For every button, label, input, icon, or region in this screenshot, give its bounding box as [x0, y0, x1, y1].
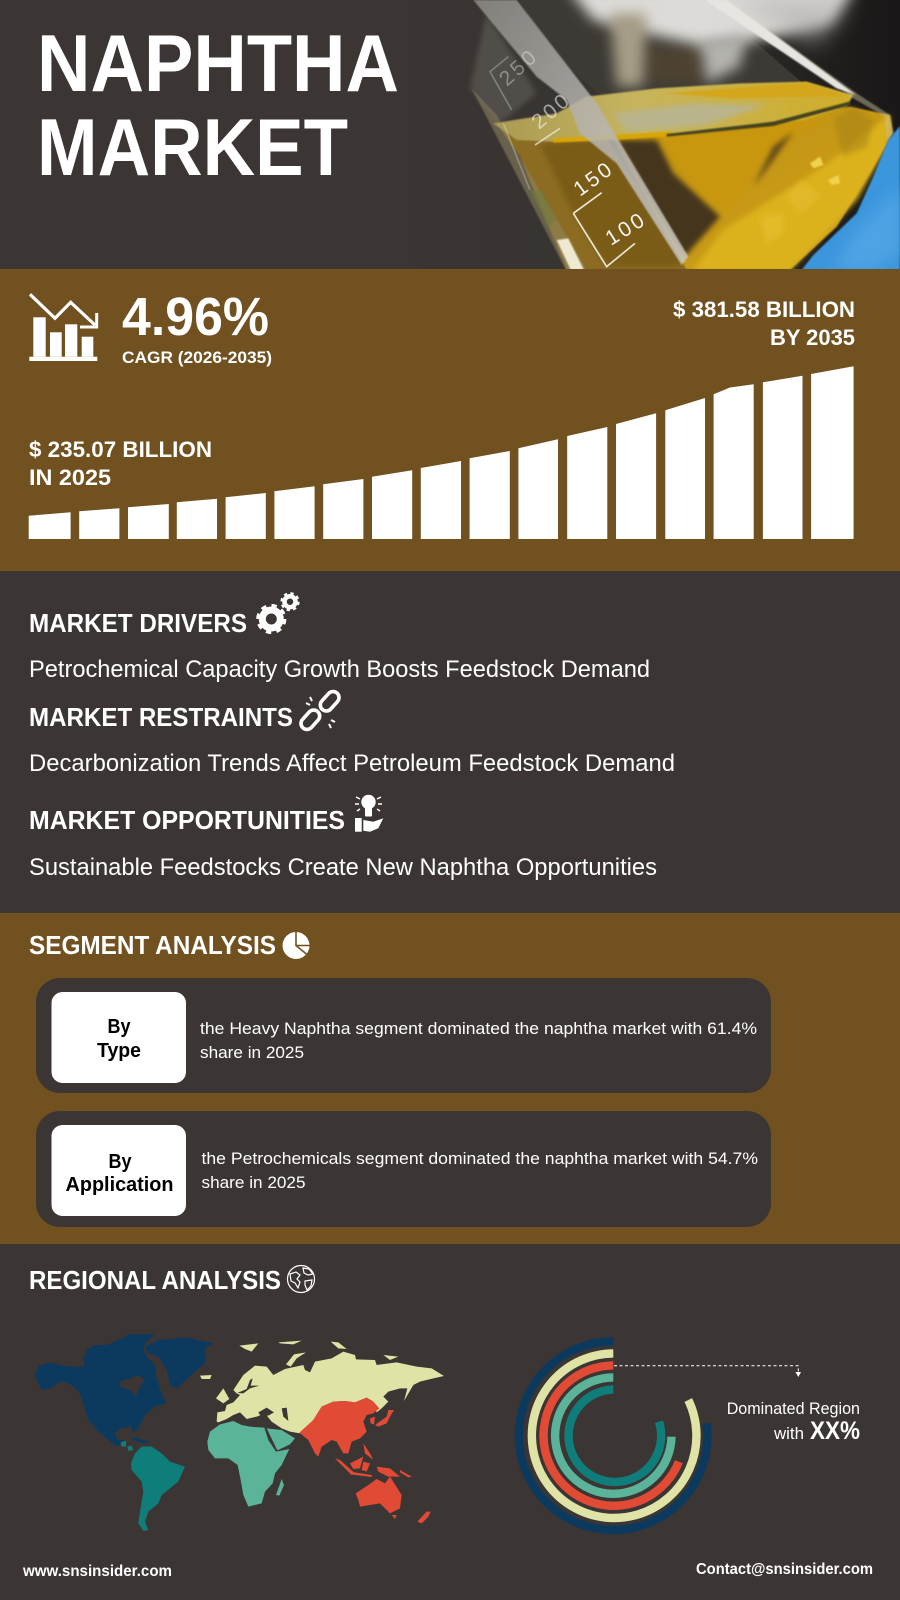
- forecast value 2035: [673, 297, 855, 350]
- footer: contact: Contact@snsinsider.com: [696, 1561, 873, 1578]
- forecast value 2035: $ 381.58 BILLION: [673, 297, 855, 322]
- photo: flask of yellow naphtha: 200: [527, 88, 576, 134]
- card: by type: [36, 978, 771, 1093]
- card: by type: share in 2025: [200, 1043, 304, 1062]
- footer: website: www.snsinsider.com: [22, 1563, 172, 1580]
- text: driver: Petrochemical Capacity Growth Boosts Feedstock Demand: [29, 656, 650, 683]
- photo: flask of yellow naphtha: 150: [569, 157, 619, 201]
- icon: trend chart: [29, 294, 97, 361]
- icon: broken chain: [299, 689, 341, 732]
- card: by application: By: [108, 1151, 132, 1173]
- map: south and east asia, oceania: [299, 1398, 431, 1523]
- map: hudson bay: [120, 1375, 145, 1397]
- radial chart: [519, 1341, 707, 1530]
- base value 2025: IN 2025: [29, 465, 111, 490]
- callout: dominated region: Dominated Region: [727, 1399, 860, 1418]
- title: NAPHTHA: [37, 19, 399, 109]
- text: opportunity: Sustainable Feedstocks Create New Naphtha Opportunities: [29, 854, 657, 881]
- icon: pie chart: [282, 932, 310, 959]
- photo: flask of yellow naphtha: 250: [495, 44, 543, 91]
- map: africa and middle east: [207, 1421, 295, 1507]
- CAGR label: CAGR (2026-2035): [122, 349, 272, 367]
- world map: [35, 1334, 444, 1531]
- heading: market restraints: MARKET RESTRAINTS: [29, 702, 293, 732]
- heading: regional analysis: REGIONAL ANALYSIS: [29, 1265, 281, 1295]
- icon: bulb in hand: [355, 795, 383, 832]
- base value 2025: $ 235.07 BILLION: [29, 437, 212, 462]
- map: americas: [35, 1334, 213, 1531]
- map: south america: [121, 1441, 185, 1531]
- heading: market opportunities: MARKET OPPORTUNITIES: [29, 805, 345, 835]
- title: [37, 19, 399, 193]
- arrow: dashed leader: [614, 1366, 801, 1377]
- panel: header: [37, 0, 900, 270]
- map: north america and greenland: [35, 1334, 213, 1447]
- title: MARKET: [37, 103, 348, 193]
- icon: globe: [288, 1266, 314, 1292]
- map: europe and north asia: [200, 1341, 444, 1433]
- heading: market drivers: MARKET DRIVERS: [29, 608, 247, 638]
- callout: dominated region: with: [773, 1424, 804, 1443]
- icon: gears: [258, 593, 298, 632]
- bar chart: growth: [29, 366, 854, 539]
- panel: market size: [0, 269, 900, 571]
- forecast value 2035: BY 2035: [770, 325, 855, 350]
- map: inland seas: [237, 1378, 288, 1421]
- callout: dominated region: XX%: [810, 1417, 860, 1445]
- CAGR value: 4.96%: [122, 287, 269, 347]
- photo: flask of yellow naphtha: [470, 0, 900, 269]
- base value 2025: [29, 437, 212, 490]
- card: by application: [36, 1111, 771, 1227]
- card: by type: Type: [97, 1040, 141, 1062]
- panel: regional analysis: [29, 1265, 860, 1531]
- text: restraint: Decarbonization Trends Affect Petroleum Feedstock Demand: [29, 750, 675, 777]
- panel: segment analysis: [0, 913, 900, 1244]
- callout: dominated region: [727, 1399, 860, 1445]
- card: by application: share in 2025: [202, 1173, 306, 1192]
- card: by application: Application: [66, 1174, 174, 1196]
- map: eastern hemisphere: [200, 1341, 444, 1523]
- photo: flask of yellow naphtha: 100: [601, 207, 651, 250]
- panel: drivers restraints opportunities: [29, 593, 675, 881]
- heading: segment analysis: SEGMENT ANALYSIS: [29, 930, 276, 960]
- card: by application: the Petrochemicals segment dominated the naphtha market with 54.7%: [202, 1149, 758, 1168]
- card: by type: By: [108, 1016, 131, 1038]
- card: by type: the Heavy Naphtha segment dominated the naphtha market with 61.4%: [200, 1019, 757, 1038]
